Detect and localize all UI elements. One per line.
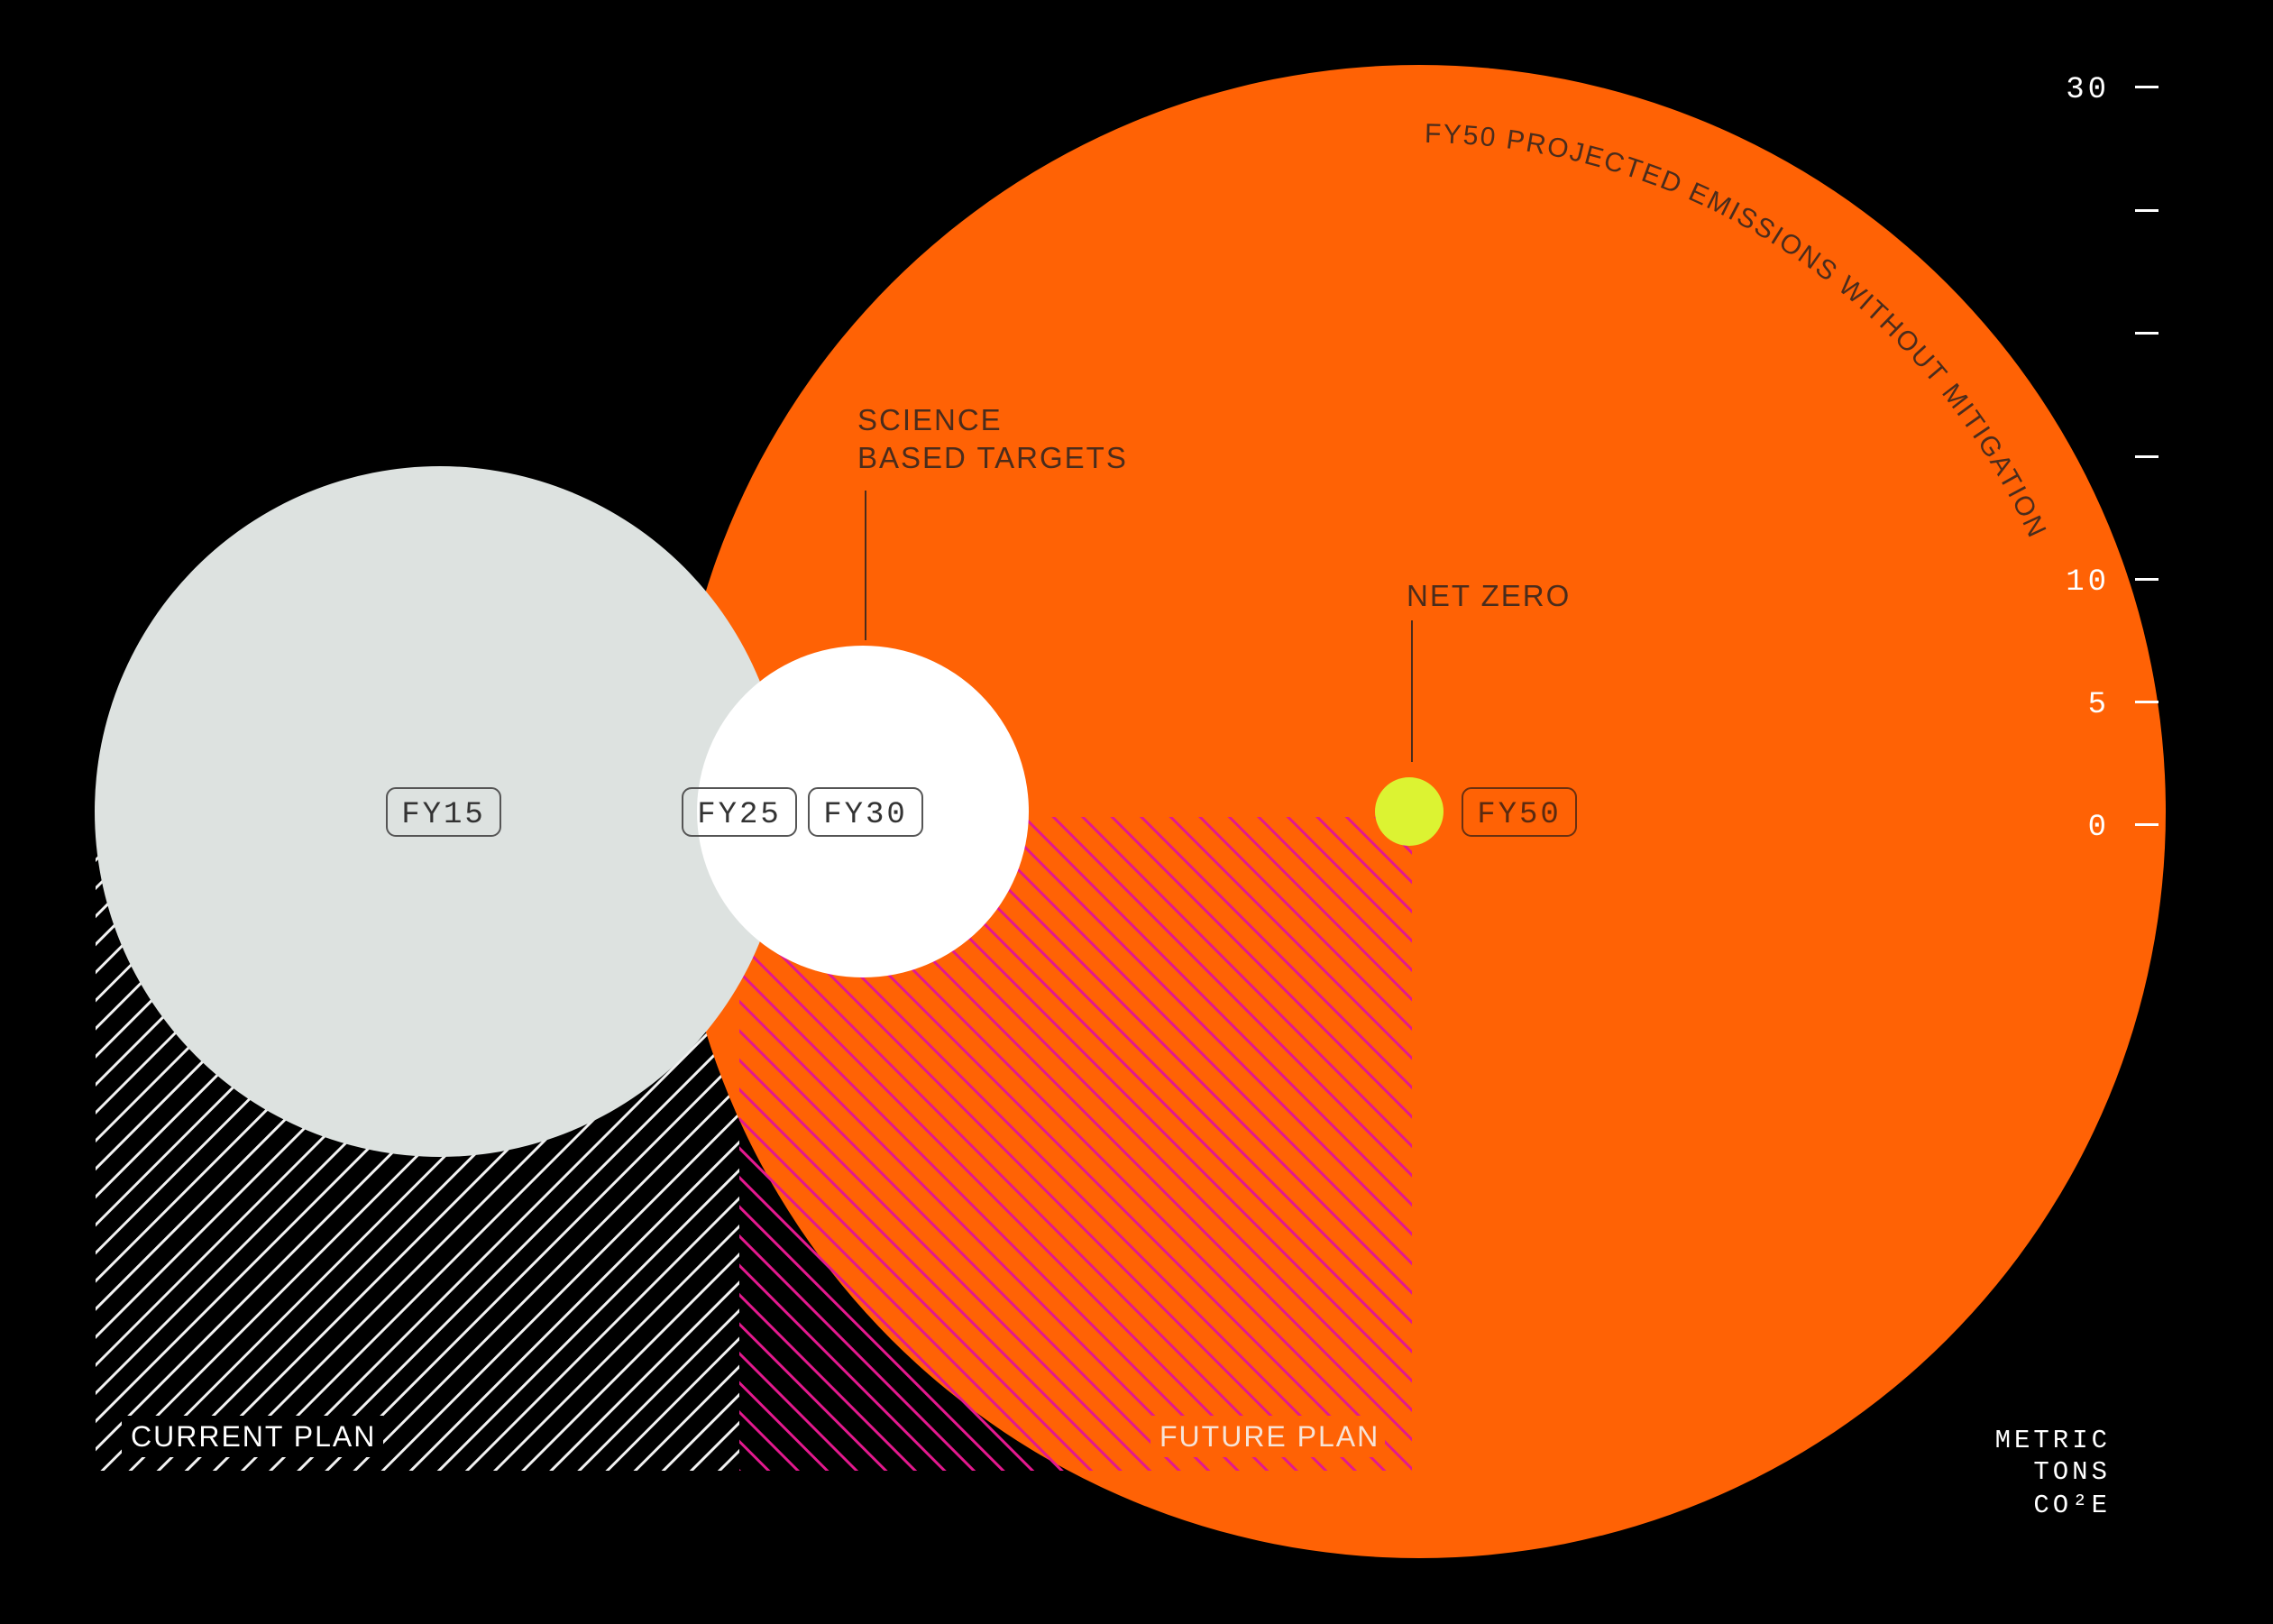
tag: FY30: FY30 bbox=[823, 798, 908, 832]
axis: scale ticks and labels: 0 bbox=[2088, 811, 2110, 845]
tag: FY25 bbox=[683, 788, 796, 836]
hatch: future plan bbox=[739, 817, 1412, 1471]
orange circle: projected emissions bbox=[673, 65, 2166, 1558]
label: science based targets: BASED TARGETS bbox=[857, 441, 1128, 474]
yellow dot: net zero bbox=[1375, 777, 1444, 846]
tag: FY15: FY15 bbox=[401, 798, 486, 832]
unit label: metric tons CO2e: CO²E bbox=[2033, 1491, 2111, 1520]
axis: scale ticks and labels: 30 bbox=[2066, 73, 2110, 107]
axis: scale ticks and labels: 5 bbox=[2088, 688, 2110, 722]
curved label: projected emissions: FY50 PROJECTED EMISSIONS WITHOUT MITIGATION bbox=[1426, 124, 2047, 537]
tag: FY25: FY25 bbox=[697, 798, 782, 832]
label: current plan: CURRENT PLAN bbox=[131, 1420, 376, 1453]
unit label: metric tons CO2e bbox=[1995, 1426, 2111, 1520]
hatch: current plan bbox=[96, 812, 739, 1471]
unit label: metric tons CO2e: TONS bbox=[2033, 1457, 2111, 1487]
gray circle: FY15 bbox=[95, 466, 785, 1157]
label: science based targets bbox=[857, 403, 1128, 640]
tag: FY15 bbox=[387, 788, 500, 836]
axis: scale ticks and labels bbox=[2066, 73, 2158, 845]
tag: FY50: FY50 bbox=[1477, 798, 1562, 832]
label: science based targets: SCIENCE bbox=[857, 403, 1003, 436]
white circle: science based targets bbox=[697, 646, 1029, 977]
label: net zero: NET ZERO bbox=[1407, 579, 1571, 612]
axis: scale ticks and labels: 10 bbox=[2066, 565, 2110, 600]
tag: FY50 bbox=[1462, 788, 1576, 836]
tag: FY30 bbox=[809, 788, 922, 836]
unit label: metric tons CO2e: METRIC bbox=[1995, 1426, 2111, 1455]
label: future plan: FUTURE PLAN bbox=[1159, 1420, 1379, 1453]
